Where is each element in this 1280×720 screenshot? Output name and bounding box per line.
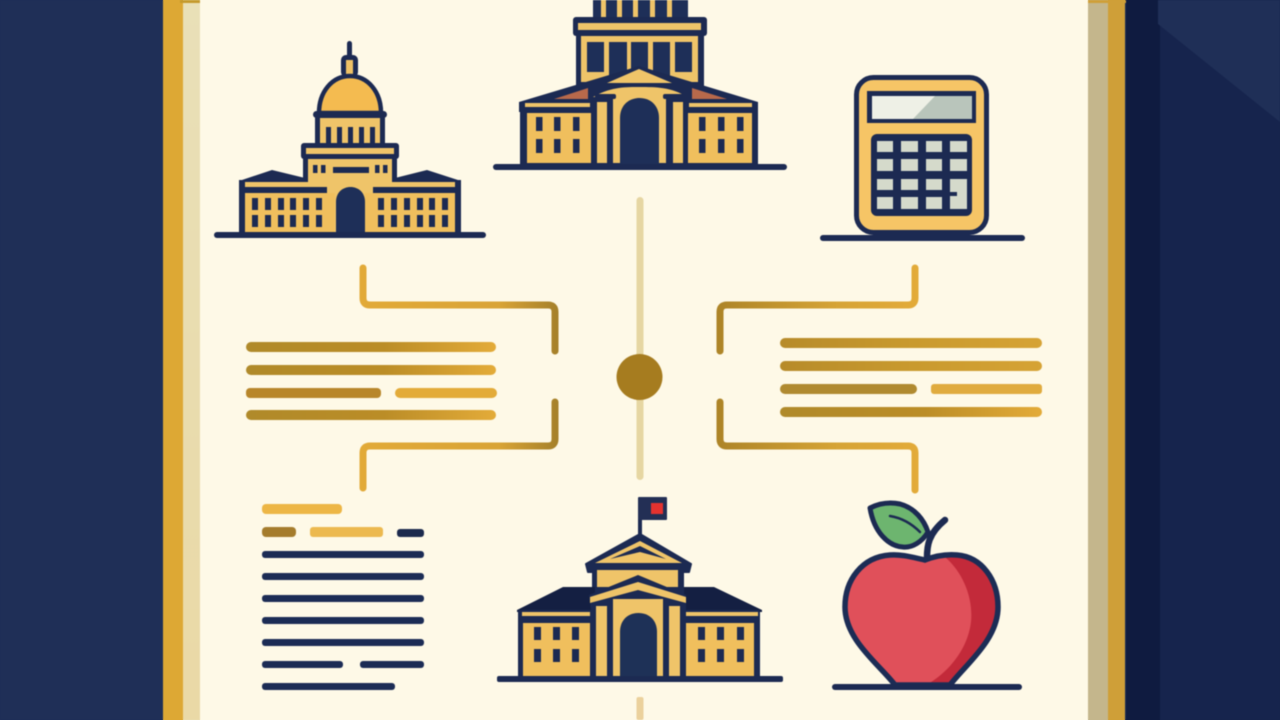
panel: gold paper frame [163,0,1126,720]
text block: left gold placeholder lines [246,342,497,420]
icon: calculator [820,78,1025,241]
icon: large government building [493,0,787,170]
icon: school building with flag [497,497,783,682]
arrow: vertical center spine [636,197,644,480]
arrow: top-right connector [720,268,915,351]
text block: right gold placeholder lines [780,338,1042,417]
arrow: bottom stub of center spine [636,697,644,720]
arrow: bottom-left connector [363,402,555,488]
icon: center node dot [616,354,662,400]
icon: domed capitol building [214,41,486,238]
text block: lower-left document lines [262,504,424,690]
icon: red apple with leaf [832,503,1022,690]
arrow: top-left connector [363,268,555,351]
arrow: bottom-right connector [720,402,915,490]
